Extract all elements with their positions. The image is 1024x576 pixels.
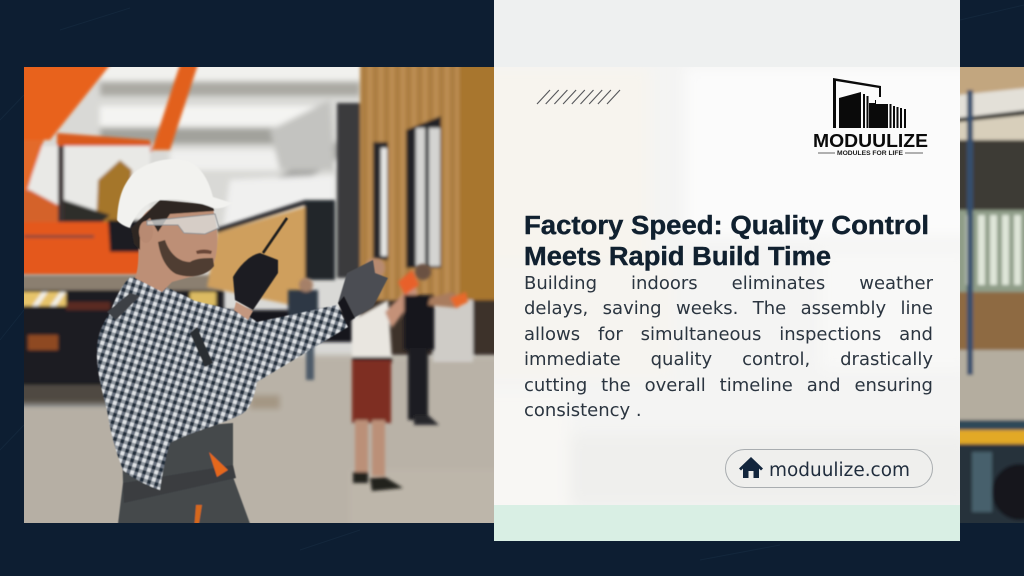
small module and wood building [206, 67, 494, 363]
body paragraph: Building indoors eliminates weather [524, 272, 933, 294]
neck and face [135, 205, 217, 292]
helmet [117, 159, 232, 228]
body paragraph [524, 272, 933, 421]
factory ceiling background [24, 67, 494, 360]
right photo strip [960, 67, 1024, 523]
radio antenna [263, 218, 287, 253]
glove holding radio [233, 253, 278, 310]
website pill [726, 450, 932, 488]
ghost background image [480, 67, 975, 515]
floor [24, 352, 494, 523]
body paragraph: consistency . [524, 400, 642, 421]
photo: worker in modular factory [24, 67, 494, 523]
website label: moduulize.com [769, 460, 910, 481]
body paragraph: immediate quality control, drastically [524, 349, 933, 370]
truck chassis [0, 275, 353, 405]
body paragraph: delays, saving weeks. The assembly line [524, 298, 933, 319]
panel: translucent white content panel [480, 0, 975, 541]
body paragraph: cutting the overall timeline and ensuring [524, 375, 933, 396]
foreground worker [97, 159, 388, 540]
shirt [97, 277, 348, 490]
bib strap [190, 327, 213, 367]
icon: house [739, 457, 763, 478]
logo tagline: MODULES FOR LIFE [837, 151, 903, 157]
pocket accent [209, 452, 228, 477]
crane [24, 67, 200, 276]
hair [131, 200, 214, 250]
heading: Factory Speed: Quality Control [524, 212, 929, 240]
decorative hatch marks [537, 90, 620, 104]
ear [138, 220, 146, 238]
background workers [288, 258, 468, 491]
logo icon: building [833, 78, 906, 128]
mint footer band [494, 505, 960, 541]
heading: Meets Rapid Build Time [524, 243, 831, 271]
body paragraph: allows for simultaneous inspections and [524, 324, 933, 345]
safety glasses [147, 214, 219, 234]
beard [158, 240, 214, 276]
open glove [338, 260, 388, 322]
heading [524, 212, 929, 271]
overalls [118, 422, 250, 523]
logo wordmark: MODUULIZE [813, 131, 928, 151]
logo: Moduulize [813, 78, 928, 157]
